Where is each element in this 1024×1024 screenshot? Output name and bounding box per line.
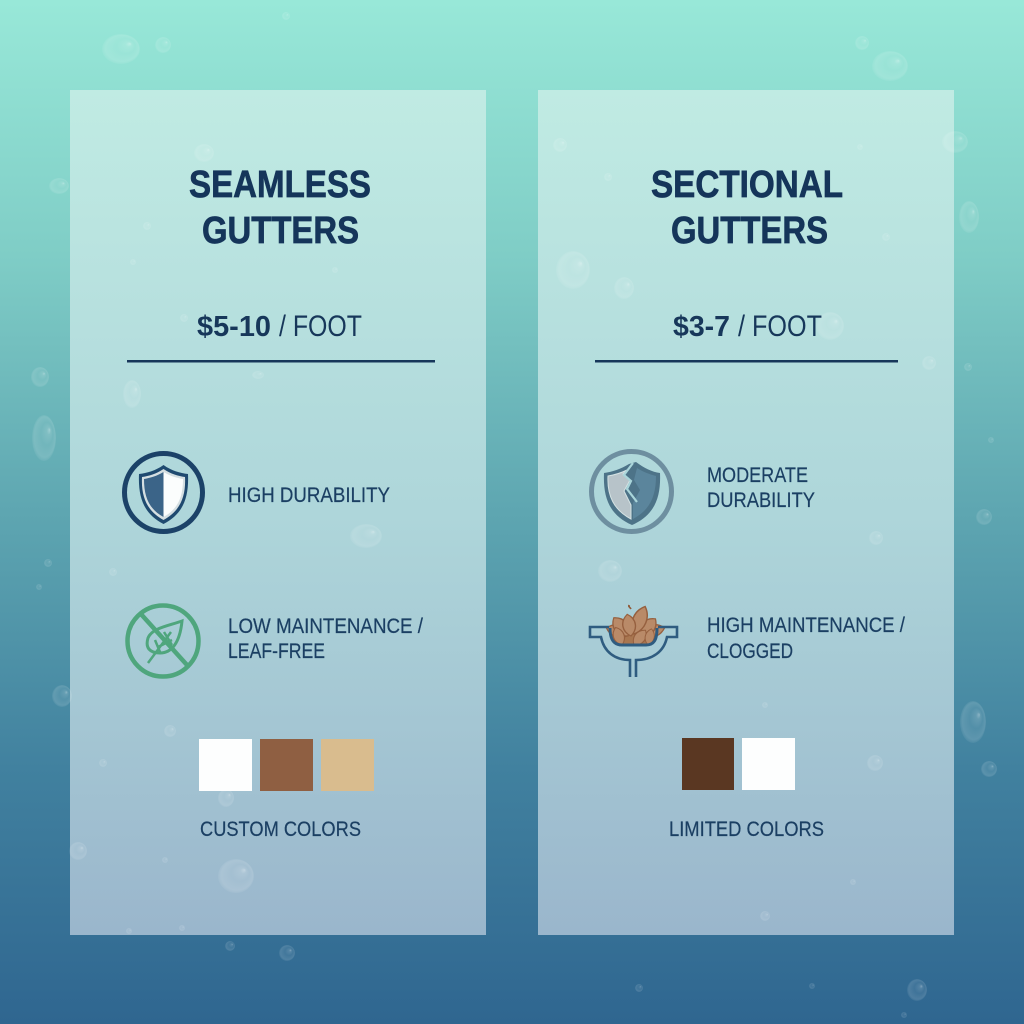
label: high durability: HIGH DURABILITY [228,484,390,507]
heading: sectional gutters: SECTIONAL [651,164,843,206]
panel: seamless gutters content [124,164,435,841]
panel: seamless gutters background [70,90,486,935]
label: high maintenance [707,614,905,663]
label: moderate durability: DURABILITY [707,489,815,512]
label: low maintenance: LOW MAINTENANCE / [228,615,423,638]
panel: sectional gutters background [538,90,954,935]
price: sectional: / FOOT [738,310,822,343]
price divider [595,360,898,362]
color swatches: limited [682,738,795,790]
price: seamless [197,310,362,343]
label: moderate durability: MODERATE [707,464,808,487]
label: limited colors: LIMITED COLORS [669,818,824,841]
price: sectional: $3-7 [673,311,730,343]
heading: seamless gutters: GUTTERS [202,210,359,252]
label: high maintenance: HIGH MAINTENANCE / [707,614,905,637]
heading: sectional gutters [651,164,843,252]
price divider [127,360,435,362]
icon: intact shield [124,454,202,532]
heading: sectional gutters: GUTTERS [671,210,828,252]
label: low maintenance [228,615,423,663]
price: seamless: / FOOT [279,310,362,343]
label: high maintenance: CLOGGED [707,640,793,663]
icon: no leaf [128,606,198,676]
label: moderate durability [707,464,815,512]
label: custom colors: CUSTOM COLORS [200,818,361,841]
panel: sectional gutters content [590,164,905,841]
icon: cracked shield [592,452,672,532]
color swatches: custom [199,739,374,791]
price: sectional [673,310,822,343]
price: seamless: $5-10 [197,311,271,343]
heading: seamless gutters: SEAMLESS [189,164,371,206]
label: low maintenance: LEAF-FREE [228,640,325,663]
icon: clogged gutter [590,604,677,677]
heading: seamless gutters [189,164,371,252]
